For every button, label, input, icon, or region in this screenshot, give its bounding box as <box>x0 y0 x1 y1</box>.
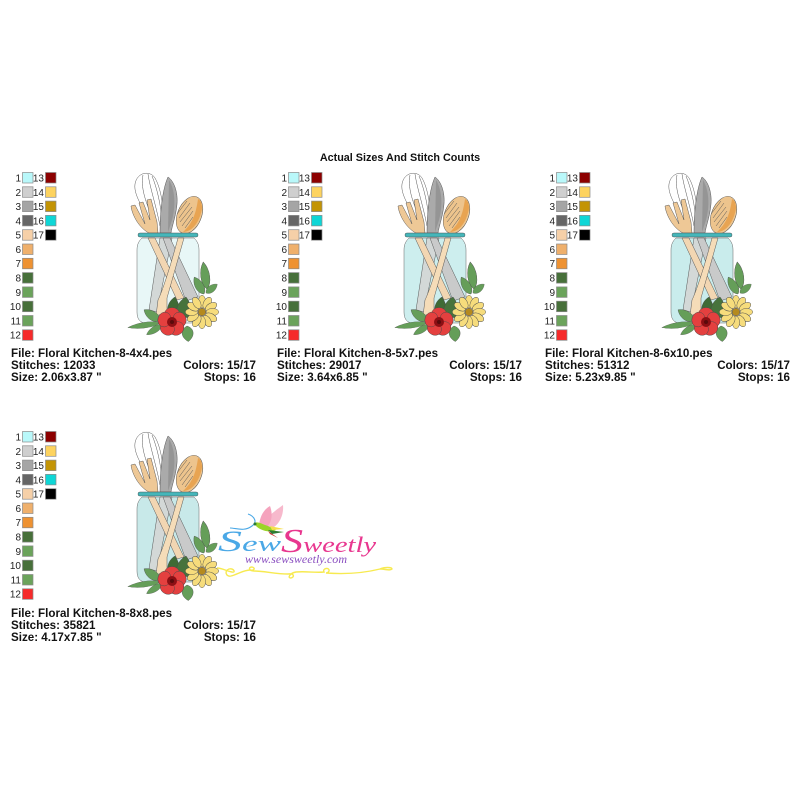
stitch details: 8x8: Colors: 15/17 <box>183 619 256 632</box>
colour legend: 5x7: 10 <box>276 302 287 313</box>
colour legend: 5x7: 9 <box>281 288 287 299</box>
colour legend: 5x7: 3 <box>281 202 287 213</box>
colour legend: 5x7 <box>276 172 322 342</box>
stitch details: 5x7: File: Floral Kitchen-8-5x7.pes <box>277 347 438 360</box>
colour legend: 6x10: 4 <box>549 216 555 227</box>
stitch details: 5x7: Stitches: 29017 <box>277 359 361 372</box>
embroidery: jar with utensils and flowers, 8x8 <box>127 432 219 601</box>
wordmark: Sew: Sew <box>218 524 282 558</box>
colour legend: 5x7: 13 <box>299 174 310 184</box>
colour legend: 4x4: 6 <box>15 245 21 256</box>
website url: www.sewsweetly.com <box>245 554 347 566</box>
stitch details: 6x10 <box>545 347 791 384</box>
colour legend: 4x4: 4 <box>15 216 21 227</box>
colour legend: 6x10: 9 <box>549 288 555 299</box>
colour legend: 6x10: 2 <box>549 188 555 199</box>
colour legend: 5x7: 5 <box>281 231 287 242</box>
stitch details: 6x10: File: Floral Kitchen-8-6x10.pes <box>545 347 713 360</box>
stitch details: 6x10: Stops: 16 <box>738 371 791 384</box>
stitch details: 5x7: Colors: 15/17 <box>449 359 522 372</box>
colour legend: 5x7: 17 <box>299 231 310 242</box>
panel: 5x7 design <box>276 172 523 384</box>
colour legend: 6x10: 6 <box>549 245 555 256</box>
wordmark: Sweetly: Sweetly <box>281 522 377 560</box>
colour legend: 8x8: 1 <box>15 432 21 444</box>
colour legend: 8x8: 9 <box>15 547 21 558</box>
colour legend: 8x8: 17 <box>33 490 44 501</box>
stitch details: 4x4: File: Floral Kitchen-8-4x4.pes <box>11 347 172 360</box>
title: Actual Sizes And Stitch Counts <box>320 152 480 164</box>
colour legend: 8x8: 8 <box>15 532 21 544</box>
colour legend: 8x8: 11 <box>11 575 21 586</box>
colour legend: 5x7: 8 <box>281 274 287 284</box>
colour legend: 4x4: 1 <box>15 174 21 184</box>
colour legend: 5x7: 11 <box>277 316 287 327</box>
colour legend: 4x4: 5 <box>15 231 21 242</box>
colour legend: 6x10: 3 <box>549 202 555 213</box>
stitch details: 8x8: Stops: 16 <box>204 631 257 644</box>
embroidery: jar with utensils and flowers, 5x7 <box>394 173 486 342</box>
colour legend: 5x7: 14 <box>299 188 310 199</box>
colour legend: 8x8: 13 <box>33 432 44 444</box>
colour legend: 6x10: 10 <box>544 302 555 313</box>
stitch details: 5x7 <box>277 347 523 384</box>
colour legend: 8x8: 7 <box>15 518 21 529</box>
stitch details: 6x10: Colors: 15/17 <box>717 359 790 372</box>
stitch details: 8x8: Stitches: 35821 <box>11 619 96 632</box>
colour legend: 4x4: 12 <box>10 331 21 342</box>
colour legend: 4x4: 9 <box>15 288 21 299</box>
colour legend: 8x8: 10 <box>10 561 21 572</box>
colour legend: 6x10: 17 <box>567 231 578 242</box>
colour legend: 8x8: 12 <box>10 590 21 601</box>
colour legend: 5x7: 4 <box>281 216 287 227</box>
colour legend: 8x8: 16 <box>33 475 44 486</box>
stitch details: 4x4 <box>11 347 257 384</box>
icon: hummingbird <box>254 505 284 538</box>
colour legend: 8x8 <box>10 432 56 601</box>
colour legend: 8x8: 2 <box>15 447 21 458</box>
colour legend: 6x10: 12 <box>544 331 555 342</box>
colour legend: 8x8: 5 <box>15 490 21 501</box>
colour legend: 5x7: 15 <box>299 202 310 213</box>
colour legend: 5x7: 6 <box>281 245 287 256</box>
colour legend: 4x4: 17 <box>33 231 44 242</box>
colour legend: 6x10: 15 <box>567 202 578 213</box>
icon: blue swirl <box>230 514 255 529</box>
colour legend: 5x7: 12 <box>276 331 287 342</box>
colour legend: 5x7: 2 <box>281 188 287 199</box>
embroidery: jar with utensils and flowers, 6x10 <box>661 173 753 342</box>
colour legend: 4x4 <box>10 172 56 342</box>
panel: 4x4 design <box>10 172 257 384</box>
colour legend: 4x4: 11 <box>11 316 21 327</box>
logo: Sew Sweetly <box>217 505 392 578</box>
colour legend: 6x10: 11 <box>545 316 555 327</box>
colour legend: 8x8: 3 <box>15 461 21 472</box>
colour legend: 6x10: 13 <box>567 174 578 184</box>
colour legend: 4x4: 3 <box>15 202 21 213</box>
colour legend: 6x10: 5 <box>549 231 555 242</box>
colour legend: 4x4: 15 <box>33 202 44 213</box>
colour legend: 4x4: 13 <box>33 174 44 184</box>
colour legend: 4x4: 2 <box>15 188 21 199</box>
colour legend: 8x8: 4 <box>15 475 21 486</box>
colour legend: 5x7: 16 <box>299 216 310 227</box>
colour legend: 8x8: 14 <box>33 447 44 458</box>
stitch details: 4x4: Stitches: 12033 <box>11 359 96 372</box>
stitch details: 4x4: Size: 2.06x3.87 " <box>11 371 102 384</box>
colour legend: 6x10: 14 <box>567 188 578 199</box>
stitch details: 8x8: Size: 4.17x7.85 " <box>11 631 102 644</box>
colour legend: 6x10: 16 <box>567 216 578 227</box>
colour legend: 6x10 <box>544 172 590 342</box>
colour legend: 6x10: 1 <box>549 174 555 184</box>
stitch details: 5x7: Size: 3.64x6.85 " <box>277 371 368 384</box>
colour legend: 5x7: 1 <box>281 174 287 184</box>
stitch details: 8x8 <box>11 607 257 644</box>
colour legend: 8x8: 6 <box>15 504 21 515</box>
colour legend: 4x4: 14 <box>33 188 44 199</box>
embroidery: jar with utensils and flowers, 4x4 <box>127 173 219 342</box>
colour legend: 4x4: 7 <box>15 259 21 270</box>
colour legend: 4x4: 8 <box>15 274 21 284</box>
colour legend: 4x4: 10 <box>10 302 21 313</box>
stitch details: 6x10: Stitches: 51312 <box>545 359 629 372</box>
colour legend: 5x7: 7 <box>281 259 287 270</box>
colour legend: 4x4: 16 <box>33 216 44 227</box>
icon: yellow flourish <box>217 567 392 578</box>
panel: 6x10 design <box>544 172 791 384</box>
colour legend: 6x10: 8 <box>549 274 555 284</box>
stitch details: 5x7: Stops: 16 <box>470 371 523 384</box>
stitch details: 4x4: Stops: 16 <box>204 371 257 384</box>
panel: 8x8 design <box>10 432 257 644</box>
stitch details: 6x10: Size: 5.23x9.85 " <box>545 371 636 384</box>
stitch details: 8x8: File: Floral Kitchen-8-8x8.pes <box>11 607 172 620</box>
colour legend: 6x10: 7 <box>549 259 555 270</box>
colour legend: 8x8: 15 <box>33 461 44 472</box>
stitch details: 4x4: Colors: 15/17 <box>183 359 256 372</box>
